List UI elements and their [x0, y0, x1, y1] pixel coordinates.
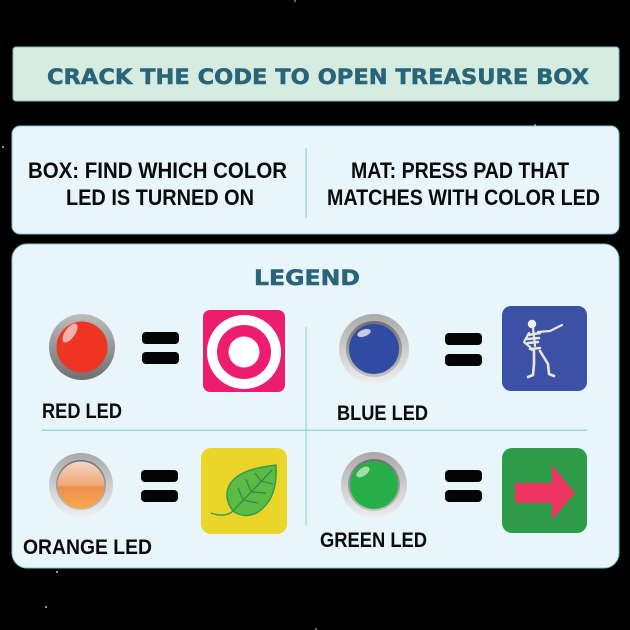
legend heading: LEGEND: [254, 266, 360, 290]
blue LED label: BLUE LED: [337, 402, 428, 425]
green LED icon: [341, 452, 407, 518]
pad: blue skeleton: [502, 306, 587, 391]
mat instruction text: MATCHES WITH COLOR LED: [327, 185, 600, 210]
orange LED label: ORANGE LED: [23, 536, 152, 559]
mat instruction text: [327, 158, 600, 210]
equals: orange: [141, 470, 178, 502]
box instruction text: [28, 158, 287, 210]
box instruction text: LED IS TURNED ON: [66, 185, 254, 210]
title banner: [13, 47, 619, 101]
equals: blue: [445, 333, 482, 366]
red LED label: RED LED: [42, 400, 122, 423]
pad: pink target: [203, 310, 285, 392]
mat instruction text: MAT: PRESS PAD THAT: [351, 158, 569, 183]
pad: yellow leaf: [201, 448, 287, 534]
title text: CRACK THE CODE TO OPEN TREASURE BOX: [47, 65, 589, 89]
orange LED icon: [49, 453, 113, 517]
blue LED icon: [339, 314, 409, 384]
panel: instructions: [12, 126, 619, 234]
box instruction text: BOX: FIND WHICH COLOR: [28, 158, 287, 183]
pad: green arrow: [502, 448, 587, 533]
red LED icon: [49, 314, 115, 380]
green LED label: GREEN LED: [320, 529, 427, 552]
equals: red: [142, 332, 179, 364]
arrow: [515, 465, 575, 520]
panel: legend: [12, 244, 619, 568]
equals: green: [445, 470, 482, 502]
